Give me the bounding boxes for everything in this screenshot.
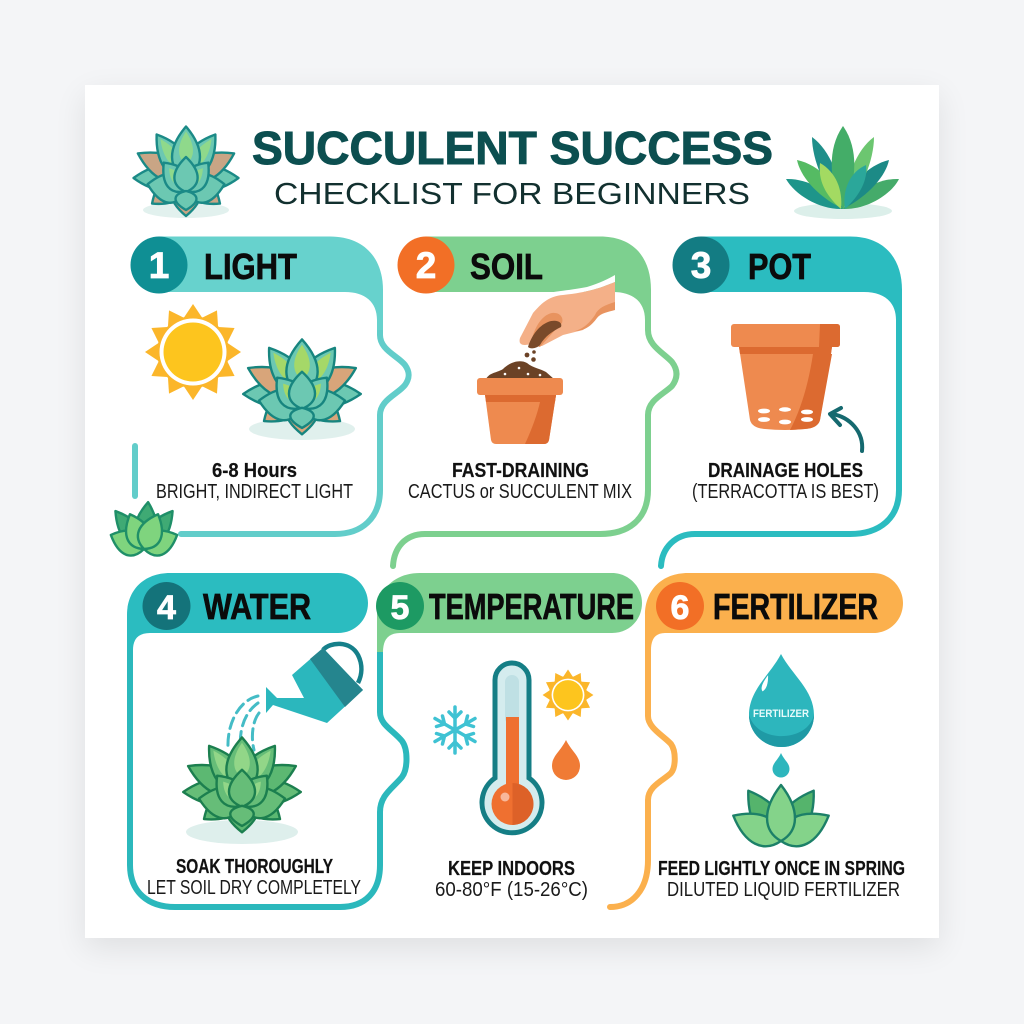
panel 6 text: FEED LIGHTLY ONCE IN SPRING	[658, 858, 905, 880]
panel 6 number badge	[656, 582, 704, 630]
icon: orange drop	[552, 740, 580, 780]
arrow	[830, 408, 862, 451]
title: SUCCULENT SUCCESS	[252, 122, 773, 174]
panel 4 text: LET SOIL DRY COMPLETELY	[147, 877, 361, 899]
icon: pot with soil	[477, 361, 563, 444]
panel 4 header band	[127, 573, 368, 650]
panel 6 header band	[645, 573, 903, 650]
panel 5 number badge: 5	[391, 589, 409, 627]
panel 4: water	[127, 573, 406, 907]
panel 1 text: 6-8 Hours	[212, 460, 297, 482]
panel 1 heading: LIGHT	[204, 246, 297, 287]
icon: small plant	[106, 501, 182, 560]
panel 6 heading: FERTILIZER	[713, 586, 878, 627]
panel 1 text: BRIGHT, INDIRECT LIGHT	[156, 481, 353, 503]
panel 6: fertilizer	[610, 573, 905, 907]
icon: sun	[145, 304, 241, 400]
panel 1 header band	[159, 236, 383, 330]
panel 1: light	[106, 236, 409, 560]
icon: fertilizer drop	[749, 654, 814, 747]
panel 3 text: DRAINAGE HOLES	[708, 460, 863, 482]
panel 1 text	[156, 460, 353, 503]
panel 5 text: 60-80°F (15-26°C)	[435, 879, 588, 901]
title	[252, 122, 773, 211]
panel 3 text: (TERRACOTTA IS BEST)	[692, 481, 879, 503]
icon: header rosette left	[132, 126, 240, 218]
decorative bar	[132, 443, 138, 499]
panel 2 text	[408, 460, 632, 503]
panel 1 border	[181, 290, 409, 534]
panel 3: pot	[661, 236, 902, 566]
panel 3 number badge	[672, 236, 730, 294]
icon: small drop	[772, 753, 790, 778]
icon: terracotta pot	[731, 324, 840, 430]
icon: watering can	[266, 644, 363, 723]
panel 3 number badge: 3	[691, 245, 711, 286]
panel 2 text: FAST-DRAINING	[452, 460, 589, 482]
panel 4 text	[147, 856, 361, 899]
card background	[85, 85, 939, 938]
panel 2 text: CACTUS or SUCCULENT MIX	[408, 481, 632, 503]
panel 1 number badge	[130, 236, 188, 294]
icon: sprout	[726, 783, 836, 854]
panel 2 header band	[426, 236, 651, 330]
icon: snowflake	[435, 707, 475, 753]
panel 4 border	[130, 625, 406, 907]
panel 5: temperature	[376, 573, 642, 901]
icon: hand with soil	[520, 275, 615, 362]
icon: thermometer	[482, 663, 542, 833]
panel 4 number badge: 4	[157, 589, 176, 627]
panel 3 border	[661, 290, 899, 566]
icon: rosette	[242, 339, 362, 440]
panel 5 heading: TEMPERATURE	[429, 586, 634, 627]
panel 3 heading: POT	[748, 246, 811, 287]
icon: header agave right	[786, 126, 899, 219]
panel 6 border	[610, 625, 675, 907]
panel 5 text	[435, 858, 588, 901]
panel 6 text	[658, 858, 905, 901]
panel 4 heading: WATER	[203, 586, 311, 627]
panel 1 number badge: 1	[149, 245, 169, 286]
panel 2 number badge: 2	[416, 245, 436, 286]
panel 2: soil	[393, 236, 676, 566]
panel 2 border	[393, 290, 676, 566]
panel 5 text: KEEP INDOORS	[448, 858, 575, 880]
panel 6 number badge: 6	[671, 589, 689, 627]
icon: fertilizer drop: FERTILIZER	[753, 708, 809, 720]
panel 6 text: DILUTED LIQUID FERTILIZER	[667, 879, 900, 901]
panel 3 text	[692, 460, 879, 503]
panel 2 heading: SOIL	[470, 246, 543, 287]
panel 4 text: SOAK THOROUGHLY	[176, 856, 333, 878]
panel 5 number badge	[376, 582, 424, 630]
panel 3 header band	[701, 236, 902, 330]
icon: green rosette	[182, 737, 302, 844]
panel 4 number badge	[142, 582, 190, 630]
panel 5 header band	[377, 573, 642, 652]
title: CHECKLIST FOR BEGINNERS	[274, 176, 750, 211]
panel 2 number badge	[398, 236, 454, 294]
icon: water drops	[228, 696, 259, 752]
icon: small sun	[543, 670, 593, 720]
